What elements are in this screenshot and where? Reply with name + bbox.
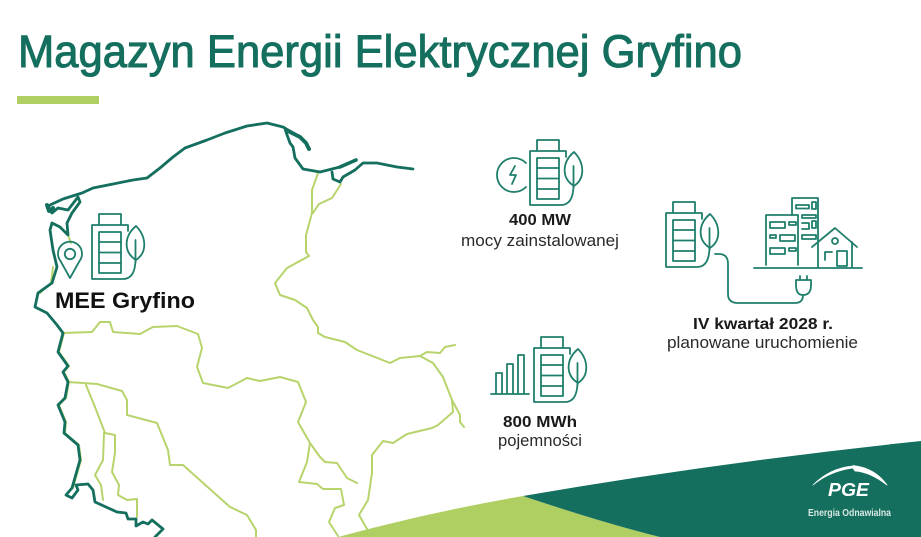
icon: battery and leaf: [534, 337, 586, 402]
coastline and border: [35, 123, 413, 537]
icon: bars: [491, 355, 529, 394]
icon: cable with plug: [715, 254, 811, 303]
logo arc: [813, 466, 887, 485]
stat: IV kwartał 2028 r.: [666, 198, 862, 352]
icon: location pin: [58, 242, 82, 278]
title accent bar: [17, 96, 99, 104]
stat: 800 MWh: [491, 337, 586, 450]
value: IV kwartał 2028 r.: [693, 316, 833, 333]
footer dark green shape: [523, 441, 921, 537]
icon: power circle: [497, 158, 526, 192]
map of western Poland: [35, 123, 464, 537]
stat: 400 MW: [461, 140, 619, 250]
icon: battery with leaf (map): [92, 214, 144, 279]
icon: battery and leaf: [666, 202, 718, 267]
logo subtitle: Energia Odnawialna: [808, 508, 891, 519]
caption: planowane uruchomienie: [667, 334, 858, 352]
logo wordmark: PGE: [828, 480, 870, 500]
icon: apartment buildings and house: [754, 198, 862, 268]
title: Magazyn Energii Elektrycznej Gryfino: [18, 26, 742, 77]
caption: mocy zainstalowanej: [461, 232, 619, 250]
footer light green shape: [338, 496, 660, 537]
value: 400 MW: [509, 212, 572, 229]
value: 800 MWh: [503, 414, 577, 431]
icon: battery, leaf and power: [530, 140, 582, 205]
rivers: [40, 173, 464, 537]
label: MEE Gryfino: MEE Gryfino: [55, 288, 195, 313]
caption: pojemności: [498, 432, 582, 450]
PGE logo: [808, 466, 891, 519]
